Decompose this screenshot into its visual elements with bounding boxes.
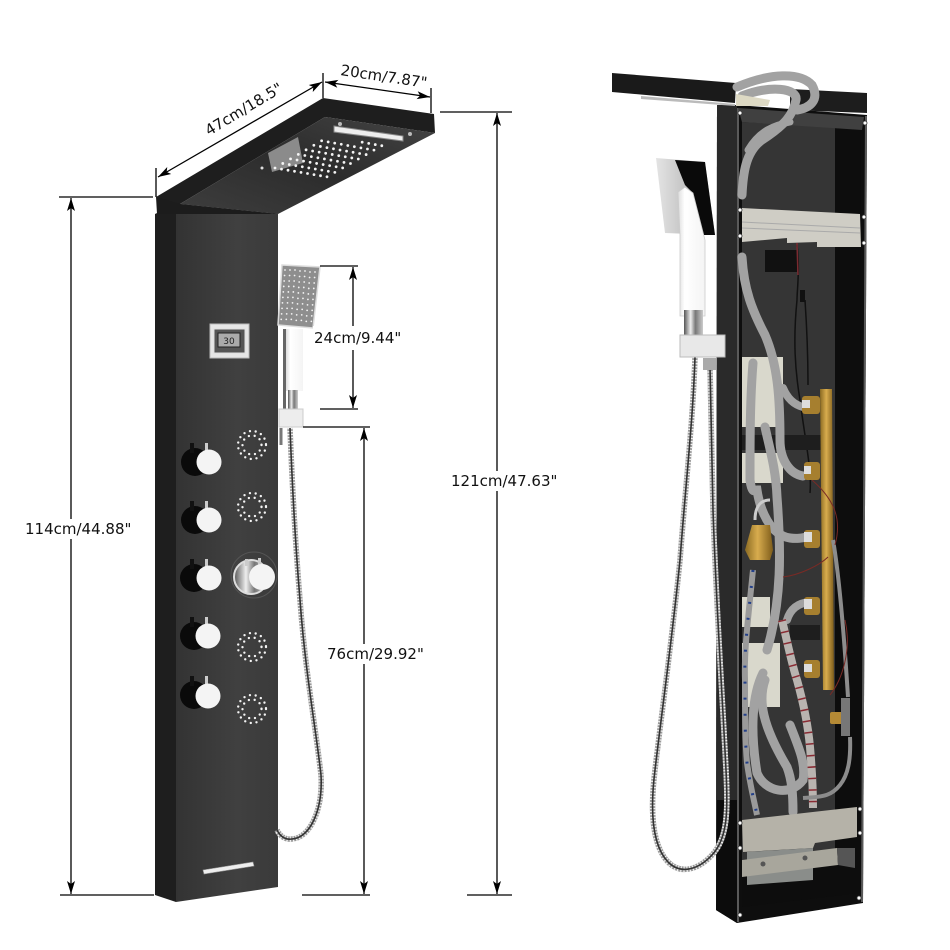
dimension: 121cm total height xyxy=(440,112,558,895)
frame edge highlights xyxy=(738,108,866,922)
hand shower hose xyxy=(277,428,321,839)
control knobs xyxy=(180,443,222,709)
thermostat dial xyxy=(231,552,277,598)
dimension: 76cm bracket height: 76cm/29.92" xyxy=(327,645,424,663)
control box and wiring xyxy=(765,243,810,493)
blue-striped braided hose xyxy=(745,570,757,815)
rain head nozzle dots xyxy=(275,137,383,177)
red-striped braided hose xyxy=(782,620,813,808)
rain head gray nozzle square xyxy=(268,137,303,172)
lower steel bracket xyxy=(742,848,855,877)
dimension: 76cm bracket height xyxy=(302,427,426,895)
overhead head seen from side xyxy=(612,73,736,103)
panel outer shell xyxy=(716,105,867,923)
brass mixing valve xyxy=(745,525,773,560)
dimension: 121cm total height: 121cm/47.63" xyxy=(451,472,557,490)
hand shower xyxy=(278,265,320,427)
dark bracket blocks xyxy=(742,435,827,640)
rear hand shower hose xyxy=(653,357,727,869)
frame screws xyxy=(738,111,867,917)
bottom waterfall spout xyxy=(203,862,254,874)
digital temperature display xyxy=(210,324,249,358)
right braided supply hose xyxy=(803,540,850,798)
dimension: 24cm hand shower xyxy=(313,266,403,409)
dimension: 20cm head width xyxy=(325,61,431,113)
overhead rain head top xyxy=(156,98,435,214)
dimension: 47cm head length xyxy=(156,73,323,197)
overhead rain head underside xyxy=(180,117,435,214)
left product: front view shower panel xyxy=(155,98,435,902)
brass fittings xyxy=(802,396,850,736)
dimension: 20cm head width: 20cm/7.87" xyxy=(339,61,428,92)
dimension: 24cm hand shower: 24cm/9.44" xyxy=(314,329,401,347)
dimension: 47cm head length: 47cm/18.5" xyxy=(202,79,286,139)
panel side face xyxy=(155,204,176,902)
cream plumbing blocks xyxy=(742,357,783,707)
lower gray hoses xyxy=(742,257,810,812)
upper gray hoses xyxy=(737,76,815,195)
digital temperature display: 30 xyxy=(223,337,235,347)
thin wires xyxy=(783,480,847,695)
body jets xyxy=(238,431,266,723)
waterfall slot on rain head xyxy=(260,122,412,170)
right product: rear internal view xyxy=(612,73,867,923)
rear head bar xyxy=(790,89,867,113)
panel front face xyxy=(176,204,278,902)
interior back wall xyxy=(742,122,861,907)
lower stone mounting plate xyxy=(742,807,857,852)
panel side strip xyxy=(716,105,737,923)
top frame bar xyxy=(738,108,864,130)
dimension: 114cm panel height: 114cm/44.88" xyxy=(25,520,131,538)
rear hand shower xyxy=(656,158,725,370)
upper stone mounting plate xyxy=(742,208,861,247)
brass manifold xyxy=(820,389,834,690)
connector block at top xyxy=(736,94,770,106)
dimension: 114cm panel height xyxy=(24,197,154,895)
gray block behind lower bracket xyxy=(747,848,813,885)
